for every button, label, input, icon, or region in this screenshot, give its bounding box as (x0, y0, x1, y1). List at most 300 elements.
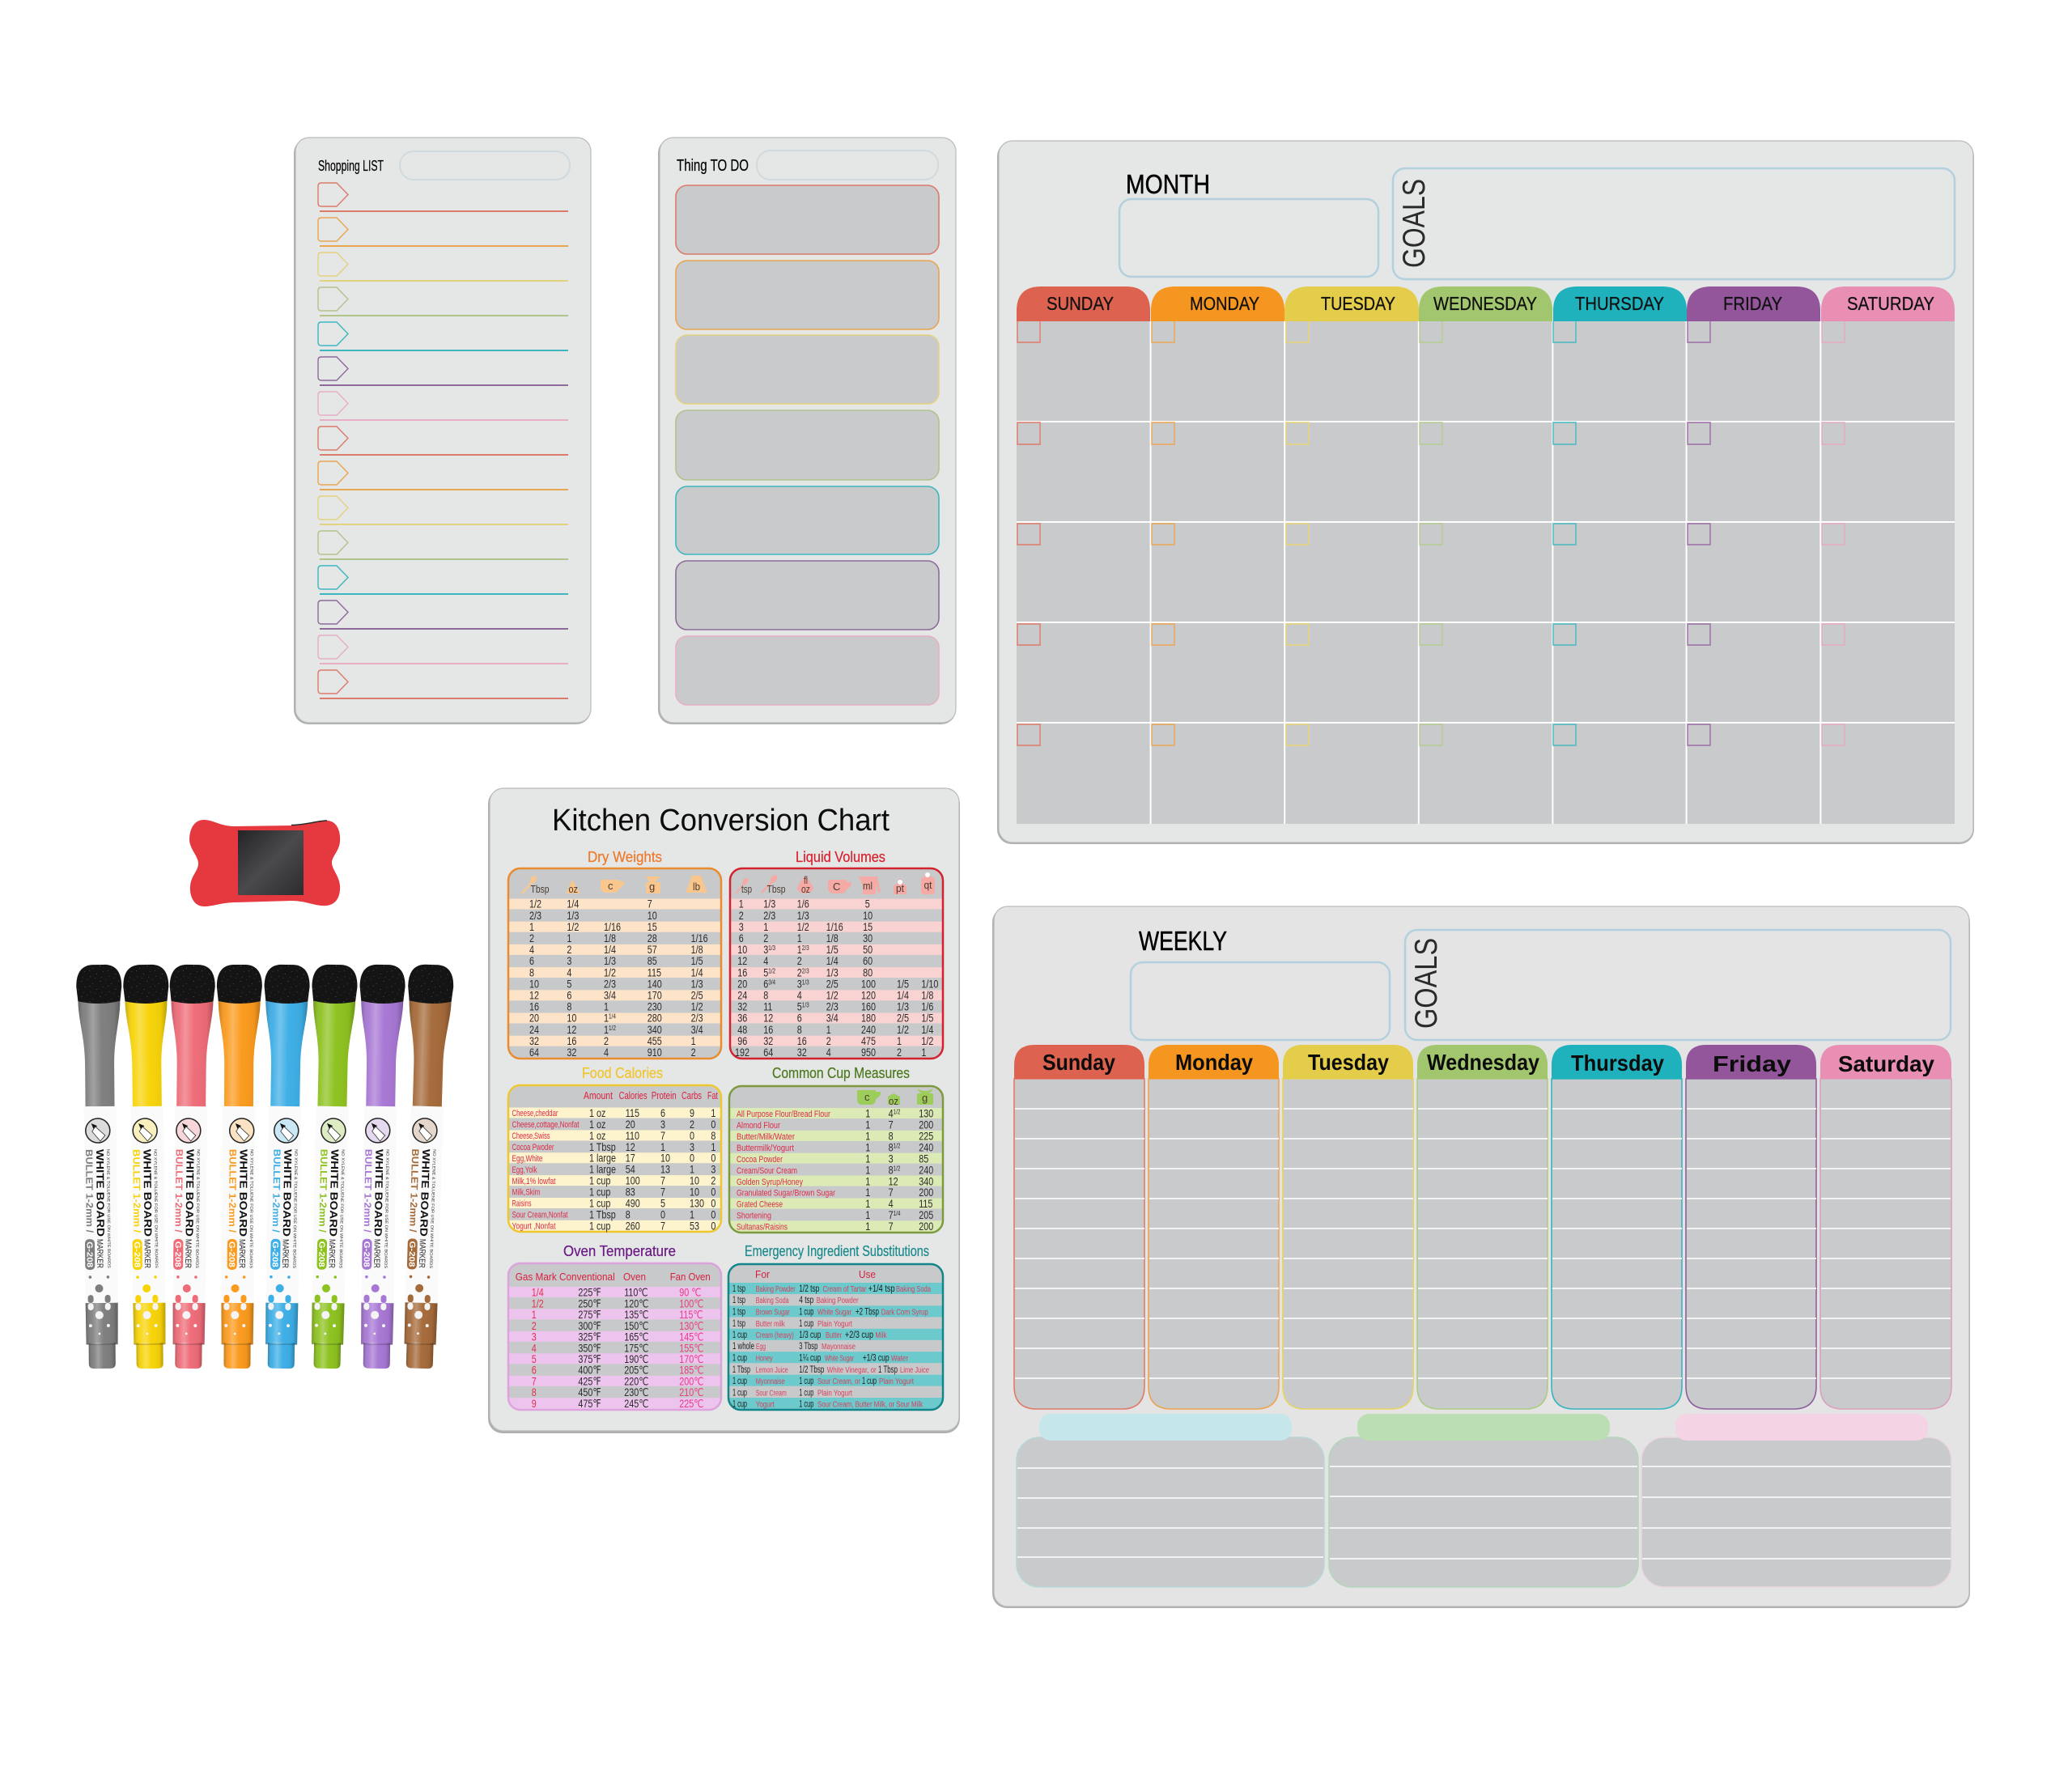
substitutions rows: Plain Yogurt (817, 1389, 852, 1398)
marker label text: G-208 (316, 1241, 326, 1267)
dry weights values: 1 (691, 1035, 696, 1047)
table: liquid volumes (730, 868, 943, 1059)
substitutions rows: Lemon Juice (756, 1366, 788, 1375)
cup measures header icons: g (922, 1092, 928, 1104)
food calories column headers: Carbs (681, 1089, 702, 1101)
oven values: 110℃ (624, 1287, 648, 1299)
liquid volumes values: 24 (737, 989, 747, 1002)
oven values: 400℉ (578, 1364, 601, 1377)
food calorie values: 8 (711, 1130, 716, 1142)
dry weights values: 64 (529, 1046, 539, 1059)
marker label text: G-208 (84, 1241, 94, 1268)
cup measure values: 1 (865, 1130, 870, 1143)
list row 12 (318, 566, 568, 594)
liquid volumes values: 64 (763, 1046, 773, 1059)
column: Sunday (1014, 1045, 1144, 1409)
ingredient names: Butter/Milk/Water (737, 1132, 795, 1142)
dry weights values: 4 (604, 1046, 609, 1059)
food calorie values: 1 cup (589, 1186, 611, 1199)
food calorie values: 10 (690, 1186, 699, 1199)
oven values (532, 1287, 703, 1410)
substitutions rows: Honey (756, 1355, 773, 1363)
marker label text: WHITE BOARD (327, 1149, 341, 1237)
ingredient names (737, 1110, 835, 1232)
liquid volumes values: 1/16 (826, 921, 843, 933)
food calorie values: 10 (660, 1152, 670, 1165)
substitutions rows: 1 cup (732, 1377, 747, 1386)
oven values: 150℃ (624, 1320, 648, 1332)
dry weights values: 340 (648, 1024, 662, 1036)
liquid volumes values: 1/5 (921, 1012, 934, 1025)
liquid volumes header icons: Tbsp (767, 883, 785, 895)
cup measure values: 1 (865, 1198, 870, 1210)
food calorie values: 0 (711, 1220, 716, 1233)
food calorie values: 53 (690, 1220, 699, 1233)
liquid volumes values: 1/2 (768, 967, 775, 975)
day header: SUNDAY (1017, 286, 1150, 321)
food calories column headers: Amount (584, 1089, 613, 1101)
liquid volumes values: 10 (863, 910, 873, 922)
dry weights values: 16 (529, 1000, 539, 1013)
liquid volumes values: 1/2 (826, 989, 839, 1002)
food calorie values: 12 (626, 1141, 635, 1153)
dry weights header icons: Tbsp (531, 883, 549, 895)
liquid volumes values: 4 (763, 955, 768, 968)
marker label text: WHITE BOARD (237, 1149, 250, 1237)
liquid volumes values: 5 (865, 898, 870, 910)
substitutions rows: 1/2 Tbsp (799, 1365, 824, 1375)
week box (1131, 962, 1390, 1040)
food calorie values: 100 (626, 1174, 640, 1187)
liquid volumes values: 5 (763, 966, 768, 979)
dry weights values: 4 (567, 966, 572, 979)
marker label text (130, 1118, 159, 1270)
ingredient names: All Purpose Flour/Bread Flour (737, 1110, 830, 1119)
cup measures header icons: c (864, 1091, 870, 1103)
dry weights values: 140 (648, 978, 662, 991)
dry weights values: 2/3 (691, 1012, 703, 1025)
liquid volumes values: 1/6 (797, 898, 809, 910)
marker label text: G-208 (362, 1241, 371, 1267)
substitutions rows: Cream (heavy) (756, 1331, 794, 1340)
cup measure values: 8 (889, 1141, 894, 1154)
cup measure values: 1 (865, 1220, 870, 1233)
cup measure values: 340 (919, 1175, 933, 1188)
oven values: 9 (532, 1398, 537, 1410)
substitutions rows (732, 1284, 931, 1410)
marker label text: BULLET 1-2mm / (270, 1149, 282, 1233)
ingredient names: Shortening (737, 1211, 771, 1220)
dry weights values: 5 (567, 978, 572, 991)
dry weights values: 1 (529, 921, 534, 933)
dry weights values: 1/16 (691, 932, 708, 944)
substitutions rows: 1/3 cup (799, 1330, 821, 1340)
day header: FRIDAY (1687, 286, 1820, 321)
dry weights values: 1/5 (691, 955, 703, 968)
dry weights values: 1/16 (604, 921, 621, 933)
dry weights values: 2/5 (691, 989, 703, 1002)
marker label text: G-208 (406, 1241, 416, 1267)
cup measure values: 85 (919, 1152, 928, 1165)
substitutions column headers: For (755, 1268, 771, 1280)
food calorie values: 1 cup (589, 1220, 611, 1233)
column: Friday (1686, 1045, 1816, 1409)
dry weights values: 280 (648, 1012, 662, 1025)
substitutions rows: Plain Yogurt (879, 1377, 914, 1386)
liquid volumes values: 11 (763, 1000, 773, 1013)
liquid volumes values: 2 (763, 932, 768, 944)
dry weights values: 1/2 (604, 966, 616, 979)
oven values: 300℉ (578, 1320, 601, 1332)
cup measure values: 200 (919, 1118, 933, 1131)
food names: Sour Cream,Nonfat (512, 1211, 568, 1220)
marker label text: NO XYLENE & TOLUENE FOR USE ON WHITE BOARDS (105, 1149, 111, 1269)
liquid volumes values: 120 (861, 989, 876, 1002)
liquid volumes values: 160 (861, 1000, 876, 1013)
marker label text: MARKER (237, 1239, 247, 1268)
dry weights values: 7 (648, 898, 652, 910)
liquid volumes values: 1/4 (921, 1024, 934, 1036)
liquid volumes values: 10 (737, 944, 747, 956)
liquid volumes values: 16 (737, 966, 747, 979)
cup measure values (865, 1108, 933, 1233)
column: Monday: Monday (1175, 1050, 1253, 1075)
liquid volumes values: 15 (863, 921, 873, 933)
food calorie values: 83 (626, 1186, 635, 1199)
liquid volumes values: 32 (797, 1046, 807, 1059)
food calories column headers: Protein (652, 1089, 677, 1101)
dry weights values: 20 (529, 1012, 539, 1025)
food calorie values: 0 (711, 1197, 716, 1210)
food calorie values: 1 Tbsp (589, 1141, 616, 1153)
liquid volumes values: 8 (797, 1024, 802, 1036)
food calorie values: 20 (626, 1118, 635, 1131)
food calorie values: 1 cup (589, 1174, 611, 1187)
oven values: 200℃ (679, 1375, 703, 1388)
food calorie values: 6 (660, 1107, 665, 1119)
liquid volumes values: 3/4 (826, 1012, 839, 1025)
liquid volumes values: 192 (735, 1046, 749, 1059)
oven values: 1/2 (532, 1297, 544, 1310)
marker label text (270, 1118, 299, 1270)
list row 4 (318, 287, 568, 316)
liquid volumes values: 1/3 (826, 966, 839, 979)
dry weights values: 1 (604, 1000, 609, 1013)
oven values: 100℃ (679, 1297, 703, 1310)
food names: Milk,1% lowfat (512, 1177, 555, 1186)
panel: kitchen conversion chart (488, 788, 960, 1433)
oven values: 210℃ (679, 1386, 703, 1399)
oven values: 245℃ (624, 1398, 648, 1410)
table: common cup measures (729, 1086, 943, 1233)
column: Monday (1149, 1045, 1279, 1409)
column: Friday: Friday (1713, 1051, 1791, 1076)
liquid volumes header icons: fl (804, 874, 808, 886)
oven column headers (516, 1271, 711, 1283)
substitutions rows: Milk (875, 1331, 887, 1340)
ingredient names: Cream/Sour Cream (737, 1166, 797, 1176)
panel: shopping list board (294, 138, 591, 724)
oven column headers: Gas Mark Conventional (516, 1271, 615, 1283)
heading: Thing TO DO: Thing TO DO (677, 157, 749, 175)
list row 6 (318, 357, 568, 385)
liquid volumes values: 96 (737, 1035, 747, 1047)
liquid volumes values: 6 (763, 978, 768, 991)
food calorie values: 1 large (589, 1152, 616, 1165)
list row 9 (318, 461, 568, 490)
oven values: 250℉ (578, 1297, 601, 1310)
ingredient names: Sultanas/Raisins (737, 1222, 788, 1232)
marker label text: NO XYLENE & TOLUENE FOR USE ON WHITE BOARDS (152, 1149, 159, 1269)
liquid volumes values: 12 (737, 955, 747, 968)
food calorie values: 130 (690, 1197, 704, 1210)
dry weights values: 10 (567, 1012, 577, 1025)
food calorie values: 7 (660, 1220, 665, 1233)
cup measure values: 1 (865, 1186, 870, 1199)
liquid volumes values: 2 (739, 910, 744, 922)
food calorie values: 5 (660, 1197, 665, 1210)
list row 14 (318, 635, 568, 664)
liquid volumes values: 1/3 (797, 910, 809, 922)
cup measure values: 7 (889, 1186, 894, 1199)
marker label text: WHITE BOARD (141, 1149, 155, 1237)
substitutions rows: 1 whole (732, 1342, 754, 1352)
day header: MONDAY: MONDAY (1190, 293, 1259, 314)
dry weights values: 1/4 (691, 966, 703, 979)
day header: SATURDAY (1821, 286, 1955, 321)
month name box (1119, 199, 1378, 277)
food calories column headers: Calories (619, 1089, 648, 1101)
marker label text: G-208 (173, 1241, 182, 1267)
dry weights values: 1 (567, 932, 572, 944)
substitutions rows: Dark Corn Syrup (881, 1308, 928, 1318)
to do box 7 (676, 636, 939, 705)
ingredient names: Granulated Sugar/Brown Sugar (737, 1188, 835, 1198)
list row 8 (318, 427, 568, 455)
list row 13 (318, 601, 568, 629)
goals box (1405, 930, 1951, 1040)
cup measure values: 200 (919, 1186, 933, 1199)
substitutions rows: Baking Powder (817, 1297, 859, 1305)
substitutions rows: Cream of Tartar (822, 1285, 867, 1294)
liquid volumes values: 3/4 (768, 978, 775, 987)
liquid volumes values: 1/3 (768, 944, 775, 952)
marker: brown (397, 964, 454, 1369)
to do box 3 (676, 335, 939, 404)
liquid volumes values: 20 (737, 978, 747, 991)
liquid volumes values: 1/10 (921, 978, 939, 991)
food names: Cheese,cheddar (512, 1109, 558, 1118)
dry weights values: 1/8 (604, 932, 616, 944)
dry weights values: 3 (567, 955, 572, 968)
substitutions rows: 1 cup (799, 1377, 813, 1386)
dry weights values: 24 (529, 1024, 539, 1036)
substitutions rows: Yogurt (756, 1400, 775, 1410)
liquid volumes values: 80 (863, 966, 873, 979)
marker: purple (354, 965, 405, 1369)
food names (512, 1109, 580, 1232)
liquid volumes values: 48 (737, 1024, 747, 1036)
cup measure values: 1 (865, 1209, 870, 1221)
dry weights values: 10 (529, 978, 539, 991)
liquid volumes values: 1/2 (797, 921, 809, 933)
liquid volumes values: 30 (863, 932, 873, 944)
to do box 4 (676, 410, 939, 480)
cup measures header icons (857, 1089, 933, 1107)
food calorie values: 1 cup (589, 1197, 611, 1210)
oven values: 155℃ (679, 1342, 703, 1355)
dry weights values: 2 (691, 1046, 696, 1059)
marker: orange (214, 965, 262, 1369)
substitutions rows: Sour Cream (756, 1389, 787, 1398)
ingredient names: Golden Syrup/Honey (737, 1178, 803, 1187)
oven values: 230℃ (624, 1386, 648, 1399)
cup measure values: 200 (919, 1220, 933, 1233)
liquid volumes header icons: oz (801, 883, 810, 895)
food calorie values: 2 (690, 1118, 694, 1131)
food calorie values: 1 (690, 1164, 694, 1176)
oven values: 115℃ (679, 1309, 703, 1321)
dry weights header icons: lb (693, 881, 700, 893)
substitutions rows: 1 tsp (732, 1319, 745, 1329)
liquid volumes values (735, 898, 939, 1059)
day header: TUESDAY: TUESDAY (1321, 293, 1395, 314)
liquid volumes values: 16 (763, 1024, 773, 1036)
day header: WEDNESDAY (1419, 286, 1552, 321)
weekly ruled lines (1015, 1109, 1951, 1378)
dry weights values: 6 (567, 989, 572, 1002)
food calories column headers (584, 1089, 718, 1101)
liquid volumes values: 1/3 (763, 898, 775, 910)
dry weights values: 1/3 (604, 955, 616, 968)
marker label text: BULLET 1-2mm / (362, 1149, 374, 1233)
column: Thursday (1552, 1045, 1682, 1409)
heading: Food Calories: Food Calories (582, 1064, 663, 1081)
marker label text: G-208 (132, 1241, 141, 1268)
food calorie values: 0 (711, 1118, 716, 1131)
liquid volumes values: 2 (797, 966, 802, 979)
marker label text: NO XYLENE & TOLUENE FOR USE ON WHITE BOARDS (248, 1149, 254, 1269)
panel: weekly planner board (992, 906, 1970, 1608)
liquid volumes values: 1 (797, 932, 802, 944)
oven values: 145℃ (679, 1330, 703, 1343)
dry weights values: 455 (648, 1035, 662, 1047)
list row 15 (318, 670, 568, 698)
cup measure values: 7 (889, 1220, 894, 1233)
marker label text (83, 1118, 111, 1270)
oven values: 130℃ (679, 1320, 703, 1332)
dry weights values: 2 (604, 1035, 609, 1047)
liquid volumes values: 1 (897, 1035, 902, 1047)
oven values: 225℉ (578, 1287, 601, 1299)
liquid volumes values: 1/3 (802, 1001, 809, 1009)
table: emergency ingredient substitutions (728, 1264, 943, 1411)
substitutions rows: White Sugar (817, 1308, 852, 1318)
oven column headers: Oven (623, 1271, 646, 1283)
substitutions rows: 1 cup (799, 1319, 813, 1329)
column: Wednesday (1417, 1045, 1548, 1409)
substitutions rows: Lime Juice (900, 1366, 929, 1375)
substitutions rows: White Vinegar, or (827, 1366, 877, 1375)
substitutions rows: Plain Yogurt (817, 1320, 852, 1329)
liquid volumes values: 2/3 (802, 967, 809, 975)
oven values: 350℉ (578, 1342, 601, 1355)
list row 1 (318, 183, 568, 211)
panel: monthly calendar board (997, 141, 1974, 844)
column: Wednesday: Wednesday (1427, 1050, 1539, 1075)
oven values: 1 (532, 1309, 537, 1321)
substitutions rows: Baking Soda (756, 1297, 789, 1305)
table: oven temperature (508, 1263, 721, 1411)
substitutions rows: +1/3 cup (863, 1353, 890, 1363)
liquid volumes values: 2/3 (763, 910, 775, 922)
food calorie values: 7 (660, 1186, 665, 1199)
dry weights values: 28 (648, 932, 657, 944)
food names: Yogurt ,Nonfat (512, 1222, 555, 1232)
oven column headers: Fan Oven (670, 1271, 711, 1283)
substitutions rows: Water (891, 1355, 909, 1363)
substitutions rows: Sour Cream, Butter Milk, or Sour Milk (817, 1400, 923, 1410)
marker label text (172, 1118, 201, 1270)
substitutions column headers (755, 1268, 876, 1280)
liquid volumes values: 1/3 (897, 1000, 909, 1013)
marker label text: G-208 (227, 1241, 236, 1267)
dry weights values: 32 (529, 1035, 539, 1047)
substitutions rows: 1 tsp (732, 1284, 745, 1294)
dry weights values: 1/8 (691, 944, 703, 956)
liquid volumes values: 3 (797, 978, 802, 991)
day header: THURSDAY: THURSDAY (1575, 293, 1664, 314)
marker label text: MARKER (183, 1239, 193, 1268)
food calorie values: 0 (711, 1186, 716, 1199)
food calorie values: 260 (626, 1220, 640, 1233)
liquid volumes header icons: tsp (741, 883, 752, 895)
liquid volumes header icons: pt (896, 882, 904, 894)
dry weights values: 115 (648, 966, 661, 979)
list row 2 (318, 218, 568, 246)
liquid volumes values: 16 (797, 1035, 807, 1047)
substitutions rows: 1 cup (732, 1389, 747, 1398)
liquid volumes values: 2/3 (802, 944, 809, 952)
dry weights values: 8 (567, 1000, 572, 1013)
list row 3 (318, 253, 568, 281)
food calorie values: 0 (711, 1152, 716, 1165)
dry weights values: 15 (648, 921, 657, 933)
cup measure values: 7 (889, 1209, 894, 1221)
goals label: GOALS (1409, 938, 1444, 1029)
substitutions rows: Myonnaise (756, 1377, 785, 1386)
cup measure values: 8 (889, 1164, 894, 1177)
dry weights values: 4 (529, 944, 534, 956)
notes box: blue (1017, 1414, 1324, 1587)
food calories column headers: Fat (707, 1089, 718, 1101)
liquid volumes values: 2 (797, 955, 802, 968)
marker: gray (76, 965, 125, 1369)
table: dry weights (508, 868, 721, 1059)
column: Tuesday (1283, 1045, 1413, 1409)
ingredient names: Buttermilk/Yogurt (737, 1144, 794, 1153)
substitutions rows: Egg (756, 1343, 766, 1352)
food calorie values: 8 (626, 1208, 631, 1221)
liquid volumes values: 1 (763, 921, 768, 933)
dry weights header icons: c (608, 880, 614, 892)
substitutions rows: 1 cup (799, 1389, 813, 1398)
liquid volumes values: 180 (861, 1012, 876, 1025)
dry weights values: 12 (567, 1024, 577, 1036)
cup measure values: 1 (865, 1108, 870, 1120)
cup measure values: 7 (889, 1118, 894, 1131)
panel: things to do board (658, 138, 956, 724)
